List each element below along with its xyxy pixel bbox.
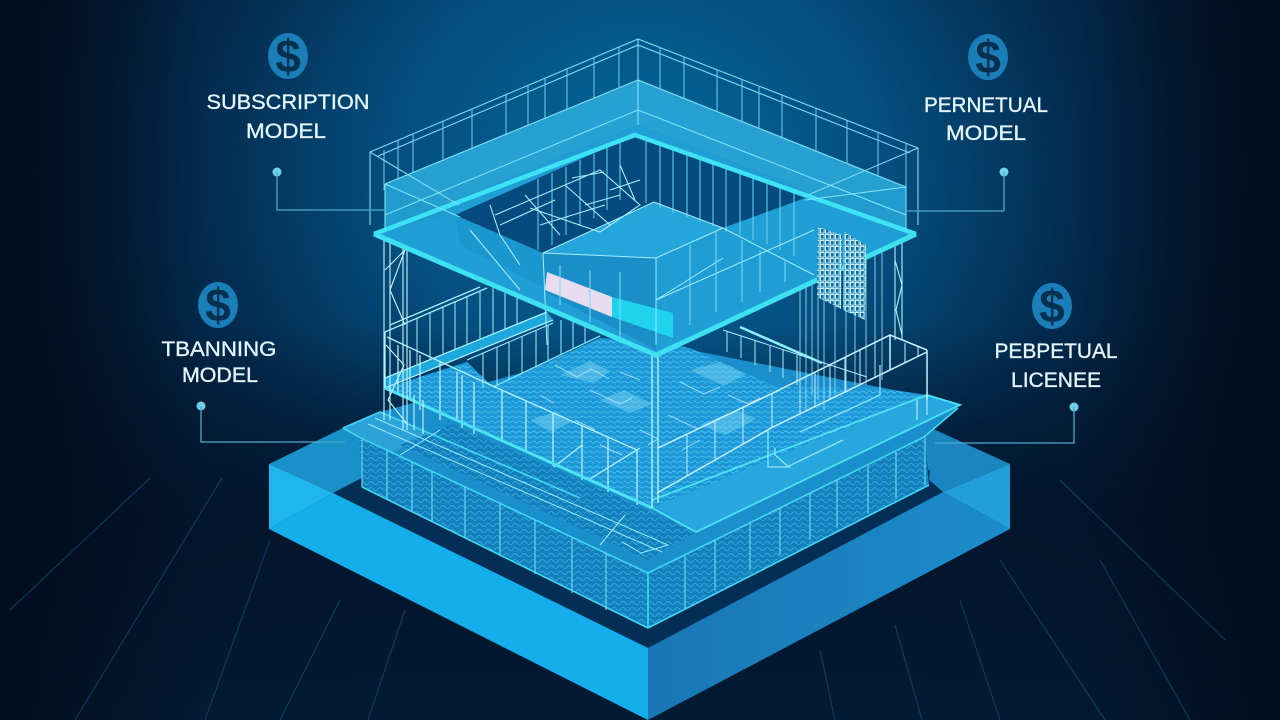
- lower deck left panel: [343, 412, 430, 452]
- plinth back left strip: [269, 428, 362, 493]
- inner box right panel: [656, 228, 814, 340]
- right pillars: [895, 240, 927, 420]
- right front rail verticals: [687, 343, 918, 476]
- inner box top face: [543, 202, 723, 258]
- label: PERNETUAL: [924, 94, 1048, 117]
- box verticals: [560, 232, 785, 338]
- left back rail verticals: [417, 276, 517, 365]
- icon: dollar coin: $: [1039, 280, 1065, 332]
- label: MODEL: [946, 122, 1026, 145]
- floor scribbles: [540, 365, 760, 455]
- connector: [196, 402, 345, 442]
- right rail tray: [768, 365, 880, 468]
- cyan block: [612, 297, 673, 338]
- label: LICENEE: [1011, 369, 1101, 392]
- label: [206, 91, 370, 143]
- icon: dollar coin: $: [205, 279, 231, 331]
- lower deck channel: [368, 418, 668, 553]
- cage outline: [370, 39, 918, 225]
- floor back edge: [493, 336, 600, 387]
- icon: dollar coin: [198, 279, 238, 331]
- floor highlights: [530, 361, 756, 435]
- plinth left corner: [269, 464, 333, 529]
- right back band: [740, 327, 822, 363]
- callout: perpetual license: [935, 280, 1118, 443]
- label: MODEL: [246, 120, 326, 143]
- lower deck mesh: [400, 424, 696, 560]
- deck darker left panel: [455, 215, 656, 345]
- wire sketch in opening: [470, 165, 640, 290]
- second rail: [467, 309, 585, 388]
- left back rail lines: [385, 287, 553, 388]
- box wire edges: [543, 202, 814, 345]
- right front rail lines: [657, 335, 927, 493]
- plinth right corner: [943, 464, 1010, 529]
- slab edges: [652, 395, 960, 532]
- ring band: [374, 80, 916, 234]
- dot grid panels: [817, 227, 866, 320]
- icon: dollar coin: $: [275, 30, 301, 82]
- connector: [272, 168, 385, 210]
- ring lines: [385, 80, 906, 230]
- middle textured floor: [385, 338, 927, 508]
- connector: [935, 402, 1078, 443]
- label: [924, 94, 1048, 145]
- right corner slab: [808, 187, 916, 234]
- left rail bright band: [385, 312, 553, 388]
- cage verticals: [384, 47, 906, 190]
- right balcony railing: [652, 327, 960, 532]
- icon: dollar coin: $: [975, 31, 1001, 83]
- callout: perpetual model: [905, 31, 1048, 211]
- lower box right mesh wall: [648, 437, 929, 628]
- lower glass box: [343, 340, 958, 628]
- pink panel: [545, 272, 612, 317]
- label: MODEL: [182, 364, 258, 387]
- label: [994, 340, 1118, 392]
- left cluster verticals: [398, 345, 474, 434]
- deck plate: [374, 125, 916, 355]
- left pillars with bracing: [384, 240, 423, 434]
- left front rail: [387, 337, 640, 505]
- lower box deck: [343, 340, 958, 573]
- icon: dollar coin: [1032, 280, 1072, 332]
- plinth left face: [269, 493, 648, 720]
- label: [162, 338, 276, 387]
- lower box left mesh wall: [359, 437, 648, 628]
- plinth right face: [648, 492, 1010, 720]
- label: TBANNING: [162, 338, 276, 361]
- back opening verticals: [538, 139, 794, 256]
- bright slab front edge: [385, 388, 652, 508]
- right back rail: [723, 330, 867, 385]
- callout: training model: [162, 279, 345, 442]
- structural pillars: [384, 200, 927, 508]
- lower wall verticals: [362, 437, 925, 610]
- left corner slab: [374, 184, 452, 234]
- lower box edges: [343, 408, 958, 628]
- upper deck: [374, 80, 916, 355]
- front pillar: [652, 355, 658, 508]
- perspective floor grid: [10, 478, 1225, 720]
- inner box front left: [543, 253, 656, 350]
- callout: subscription model: [206, 30, 385, 210]
- plinth dark well: [333, 470, 943, 648]
- opening dark interior: [455, 135, 805, 253]
- connector: [905, 168, 1008, 211]
- label: PEBPETUAL: [994, 340, 1118, 363]
- left balcony railing: [385, 276, 652, 508]
- right cluster verticals: [800, 200, 882, 410]
- label: SUBSCRIPTION: [206, 91, 370, 114]
- plinth base: [269, 428, 1010, 720]
- top wireframe cage: [370, 39, 918, 225]
- floor surface: [385, 338, 927, 508]
- plinth back right strip: [924, 428, 1010, 492]
- icon: dollar coin: [968, 31, 1008, 83]
- plate edges: [374, 135, 916, 234]
- icon: dollar coin: [268, 30, 308, 82]
- right deck slab: [652, 395, 960, 532]
